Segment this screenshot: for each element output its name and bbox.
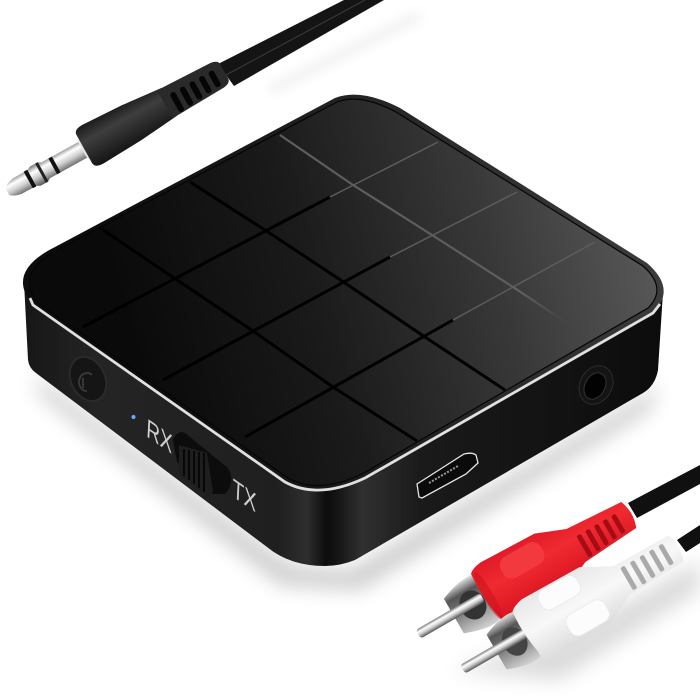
metal plug pin bbox=[2, 137, 93, 201]
red RCA plug bbox=[403, 485, 648, 665]
plug housing bbox=[74, 83, 180, 168]
cable strands bbox=[218, 0, 384, 86]
RCA cables bbox=[403, 465, 700, 700]
strain relief bbox=[157, 57, 232, 118]
status LED bbox=[132, 415, 136, 419]
power button bbox=[63, 351, 113, 407]
audio port bbox=[572, 360, 620, 410]
red plug pin bbox=[416, 593, 485, 639]
TX label: TX bbox=[232, 474, 257, 519]
top face bbox=[29, 99, 657, 486]
red plug metal sleeve bbox=[440, 573, 500, 640]
micro USB port bbox=[417, 453, 478, 498]
RX label: RX bbox=[146, 414, 173, 460]
plug shadow bbox=[450, 560, 700, 680]
white plug pin bbox=[460, 629, 528, 674]
red plug grip facet bbox=[496, 538, 548, 582]
silver edge highlight bbox=[30, 298, 660, 490]
mode slide switch bbox=[173, 432, 231, 496]
white plug grip facets bbox=[535, 566, 613, 645]
touch panel grid bbox=[83, 135, 595, 441]
white plug ribs bbox=[620, 543, 676, 590]
cable shadow bbox=[270, 15, 420, 90]
top rim bbox=[23, 95, 664, 490]
white plug housing bbox=[509, 518, 695, 664]
white RCA plug bbox=[447, 518, 695, 700]
red plug housing bbox=[468, 485, 648, 627]
device shadow bbox=[35, 375, 660, 590]
white channel cable bbox=[677, 525, 700, 552]
white plug metal sleeve bbox=[483, 610, 541, 676]
device bbox=[23, 95, 664, 566]
3.5mm audio cable bbox=[0, 0, 420, 211]
red channel cable bbox=[628, 465, 700, 518]
red plug ribs bbox=[576, 514, 628, 558]
device side walls bbox=[24, 282, 663, 566]
